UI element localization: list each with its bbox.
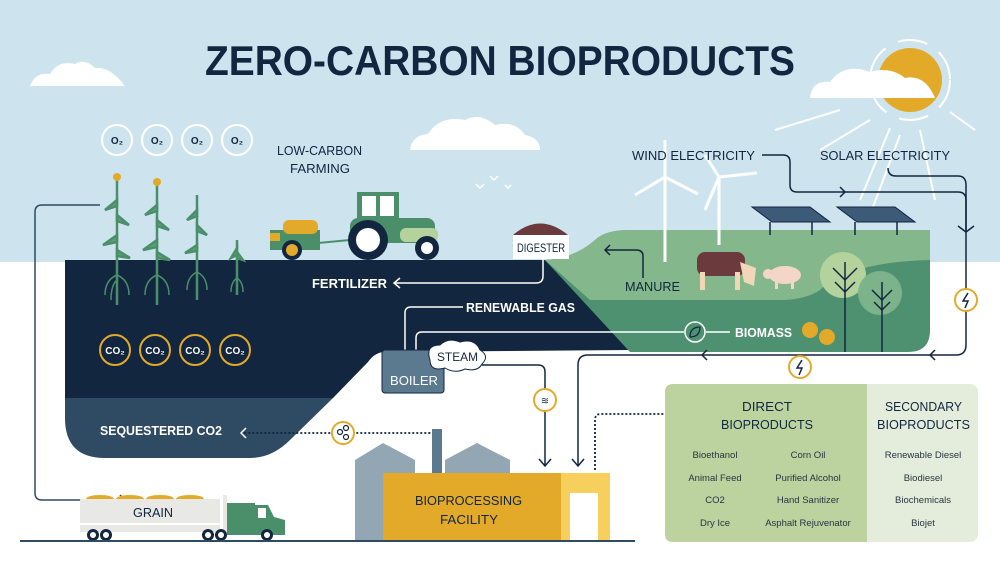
sequestered co2 band	[65, 398, 333, 458]
boiler	[382, 350, 444, 393]
list: direct bioproducts: Dry Ice	[700, 518, 730, 529]
list: direct bioproducts: Bioethanol	[693, 450, 737, 461]
pig	[763, 266, 801, 289]
icon: lightning center	[789, 356, 811, 378]
list: direct bioproducts: Asphalt Rejuvenator	[765, 518, 851, 529]
light green band	[545, 230, 930, 300]
digester	[513, 224, 569, 259]
green pasture land	[545, 230, 930, 352]
cow	[697, 252, 756, 290]
label: manure: MANURE	[625, 279, 680, 294]
O2 molecules: O₂	[191, 136, 203, 147]
CO2 molecules: CO₂	[185, 346, 205, 357]
label: sequestered co2: SEQUESTERED CO2	[100, 423, 222, 438]
corn plants	[103, 180, 243, 305]
truck: GRAIN	[133, 505, 173, 520]
CO2 molecules: CO₂	[145, 346, 165, 357]
heading: direct bioproducts	[721, 399, 813, 432]
icon: sun with cloud	[775, 40, 975, 215]
panel: bioproducts	[665, 384, 978, 542]
list: direct bioproducts: Purified Alcohol	[775, 473, 841, 484]
cloud center	[410, 117, 540, 150]
CO2 molecules: CO₂	[225, 346, 245, 357]
O2 molecules: O₂	[111, 136, 123, 147]
list: secondary bioproducts: Biodiesel	[904, 473, 942, 484]
label: low-carbon farming	[277, 143, 362, 176]
bioprocessing facility: BIOPROCESSING	[415, 493, 522, 508]
CO2 molecules: CO₂	[105, 346, 125, 357]
label: manure	[605, 245, 680, 294]
wind turbines	[635, 140, 757, 262]
solar panels	[752, 207, 915, 235]
renewable gas flow	[405, 300, 575, 352]
bioprocessing facility	[355, 429, 610, 541]
renewable gas flow: RENEWABLE GAS	[466, 300, 575, 315]
label: low-carbon farming: LOW-CARBON	[277, 143, 362, 158]
icon: heat	[534, 389, 556, 411]
sky background	[0, 0, 1000, 262]
cloud left	[30, 62, 125, 86]
grain flow	[35, 205, 125, 505]
list: secondary bioproducts: Biojet	[911, 518, 935, 529]
heading: direct bioproducts: BIOPRODUCTS	[721, 417, 813, 432]
digester: DIGESTER	[517, 241, 565, 255]
trees	[820, 252, 902, 352]
O2 molecules: O₂	[231, 136, 243, 147]
steam cloud	[429, 340, 486, 371]
energy lines	[572, 155, 974, 466]
biomass flow: BIOMASS	[735, 325, 792, 340]
list: secondary bioproducts: Biochemicals	[895, 495, 951, 506]
boiler: BOILER	[390, 373, 438, 388]
tractor	[270, 192, 439, 260]
list: direct bioproducts: Corn Oil	[791, 450, 825, 461]
heading: secondary bioproducts: SECONDARY	[885, 399, 962, 414]
O2 molecules: O₂	[151, 136, 163, 147]
label: solar electricity: SOLAR ELECTRICITY	[820, 148, 950, 163]
CO2 molecules	[100, 335, 250, 365]
icon: lightning right	[955, 289, 977, 311]
steam cloud: STEAM	[437, 350, 478, 364]
label: wind electricity: WIND ELECTRICITY	[632, 148, 755, 163]
icon: heat: ≋	[541, 396, 549, 407]
truck	[80, 495, 285, 541]
heading: secondary bioproducts: BIOPRODUCTS	[877, 417, 970, 432]
dotted to products	[595, 409, 688, 470]
heading: secondary bioproducts	[877, 399, 970, 432]
list: secondary bioproducts	[885, 450, 961, 529]
list: direct bioproducts	[688, 450, 851, 529]
ground line	[20, 540, 635, 542]
list: direct bioproducts: CO2	[705, 495, 725, 506]
dotted to sequestered co2	[240, 422, 436, 470]
label: low-carbon farming: FARMING	[290, 161, 350, 176]
steam flow	[482, 365, 551, 466]
title: ZERO-CARBON BIOPRODUCTS	[205, 37, 795, 84]
birds	[476, 176, 511, 188]
fertilizer flow	[312, 259, 543, 291]
heading: direct bioproducts: DIRECT	[742, 399, 792, 414]
list: secondary bioproducts: Renewable Diesel	[885, 450, 961, 461]
list: direct bioproducts: Hand Sanitizer	[777, 495, 839, 506]
biomass flow	[416, 322, 835, 352]
fertilizer flow: FERTILIZER	[312, 276, 388, 291]
O2 molecules	[102, 125, 252, 155]
bioprocessing facility: FACILITY	[440, 512, 498, 527]
ground: navy soil	[65, 260, 630, 398]
list: direct bioproducts: Animal Feed	[688, 473, 742, 484]
